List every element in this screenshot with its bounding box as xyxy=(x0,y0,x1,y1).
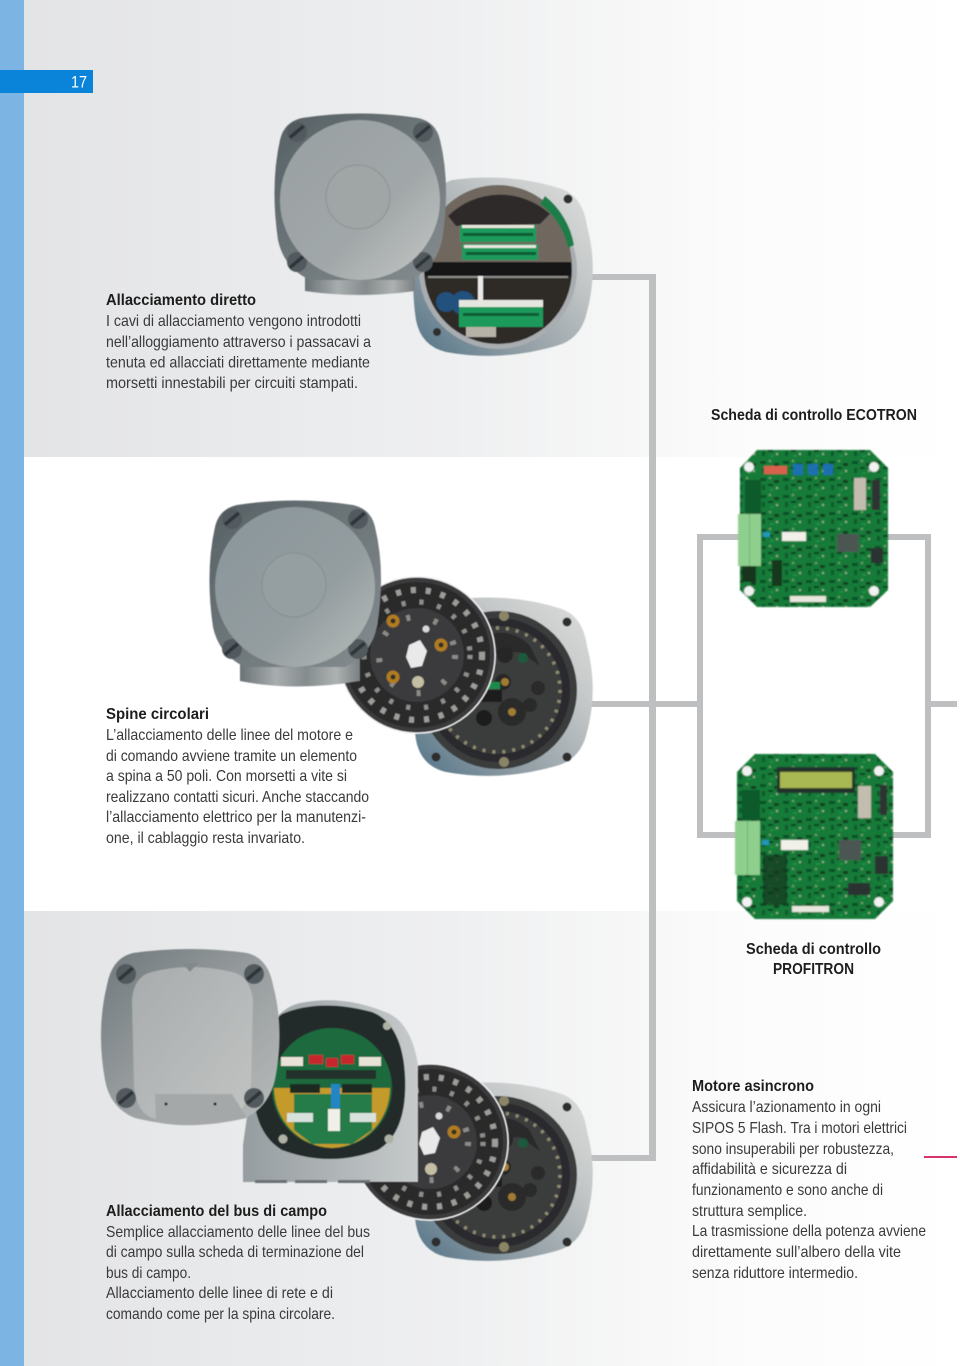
label: Scheda di controllo PROFITRON: PROFITRON xyxy=(773,961,854,978)
device: open housing with terminal blocks xyxy=(413,177,593,356)
text block: Spine circolari: di comando avviene tramite un elemento xyxy=(106,748,357,765)
text block: Motore asincrono: Motore asincrono xyxy=(692,1078,814,1095)
device: lid of circular plug xyxy=(209,500,381,686)
circuit board: ECOTRON xyxy=(738,450,888,607)
page number tab: 17 xyxy=(71,72,87,92)
text block: Allacciamento diretto: Allacciamento diretto xyxy=(106,292,256,309)
text block: Allacciamento diretto xyxy=(106,292,371,392)
text block: Spine circolari: a spina a 50 poli. Con morsetti a vite si xyxy=(106,768,347,785)
text block: Allacciamento del bus di campo: di campo sulla scheda di terminazione del xyxy=(106,1244,364,1261)
device: lid with cable neck xyxy=(274,114,446,295)
text block: Spine circolari: Spine circolari xyxy=(106,706,209,723)
page number tab xyxy=(0,70,93,93)
text block: Motore asincrono xyxy=(692,1078,926,1282)
background panel: bottom xyxy=(24,911,960,1366)
device: bus terminal housing xyxy=(243,1000,418,1183)
text block: Motore asincrono: Assicura l’azionamento in ogni xyxy=(692,1099,881,1116)
background panel: top xyxy=(24,0,960,457)
text block: Allacciamento diretto: morsetti innestabili per circuiti stampati. xyxy=(106,375,358,392)
text block: Allacciamento del bus di campo: comando come per la spina circolare. xyxy=(106,1306,335,1323)
text block: Spine circolari xyxy=(106,706,369,847)
text block: Spine circolari: l’allacciamento elettrico per la manutenzi- xyxy=(106,809,366,826)
text block: Motore asincrono: affidabilità e sicurezza di xyxy=(692,1161,847,1178)
text block: Motore asincrono: direttamente sull’albero della vite xyxy=(692,1244,901,1261)
text block: Allacciamento diretto: I cavi di allacciamento vengono introdotti xyxy=(106,313,361,330)
device: open housing of bus variant xyxy=(413,1082,593,1261)
text block: Allacciamento diretto: tenuta ed allacciati direttamente mediante xyxy=(106,354,370,372)
text block: Spine circolari: realizzano contatti sicuri. Anche staccando xyxy=(106,789,369,806)
text block: Allacciamento del bus di campo: bus di campo. xyxy=(106,1265,191,1282)
device: open housing with pin contacts xyxy=(413,597,593,776)
text block: Spine circolari: one, il cablaggio resta invariato. xyxy=(106,830,305,847)
label: Scheda di controllo PROFITRON xyxy=(746,941,881,978)
text block: Motore asincrono: SIPOS 5 Flash. Tra i motori elettrici xyxy=(692,1120,907,1137)
circuit board: PROFITRON xyxy=(735,754,893,919)
text block: Allacciamento del bus di campo xyxy=(106,1203,370,1323)
text block: Allacciamento del bus di campo: Allacciamento del bus di campo xyxy=(106,1203,327,1220)
text block: Motore asincrono: sono insuperabili per robustezza, xyxy=(692,1141,894,1158)
text block: Allacciamento del bus di campo: Allacciamento delle linee di rete e di xyxy=(106,1285,333,1302)
left blue band xyxy=(0,0,24,1366)
text block: Motore asincrono: senza riduttore intermedio. xyxy=(692,1265,858,1282)
text block: Motore asincrono: La trasmissione della potenza avviene xyxy=(692,1223,926,1240)
text block: Spine circolari: L’allacciamento delle linee del motore e xyxy=(106,727,353,744)
device: circular plug disc xyxy=(338,576,496,734)
text block: Allacciamento diretto: nell’alloggiamento attraverso i passacavi a xyxy=(106,334,371,351)
connector lines xyxy=(585,274,957,1161)
magenta mark xyxy=(924,1156,957,1158)
text block: Motore asincrono: struttura semplice. xyxy=(692,1203,807,1220)
device: bus lid xyxy=(101,949,280,1125)
label: Scheda di controllo ECOTRON: Scheda di controllo ECOTRON xyxy=(711,407,917,424)
device: bus disc xyxy=(351,1063,509,1221)
label: Scheda di controllo PROFITRON: Scheda di controllo xyxy=(746,941,881,958)
text block: Allacciamento del bus di campo: Semplice allacciamento delle linee del bus xyxy=(106,1224,370,1241)
text block: Motore asincrono: funzionamento e sono anche di xyxy=(692,1182,883,1199)
